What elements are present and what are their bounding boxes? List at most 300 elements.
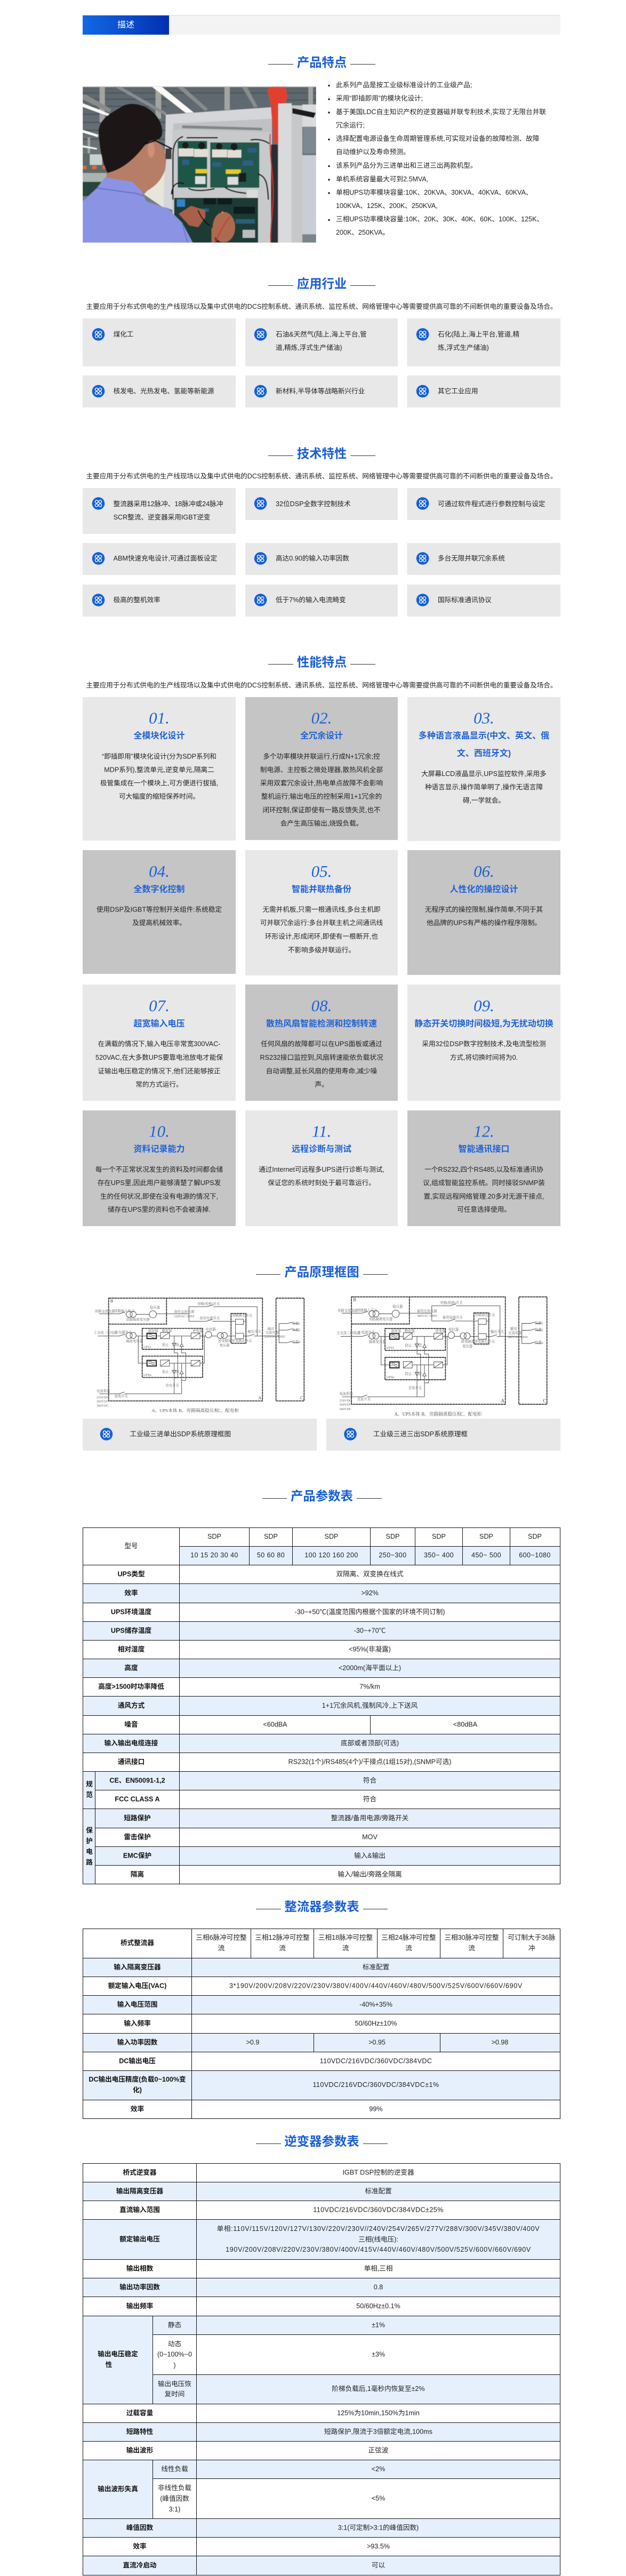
tab: 描述: 描述 — [117, 20, 134, 30]
diagram: three-in single-out SDP schematic: 直流开关 — [114, 1393, 128, 1398]
row: 型号: SDP — [207, 1533, 221, 1540]
row: 效率: 效率 — [133, 2542, 147, 2550]
diagram: three-in three-out SDP schematic: 旁路静态开关 — [475, 1312, 495, 1317]
row: 效率: >92% — [361, 1589, 379, 1597]
card: 石化: 炼,浮式生产储油) — [438, 344, 489, 351]
row: 输入功率因数: >0.98 — [492, 2038, 508, 2046]
diagram: three-in single-out SDP schematic: 旁路隔离变压器 — [126, 1317, 150, 1322]
feature bullet list: 单相UPS功率模块容量:10K、20KVA、30KVA、40KVA、60KVA、 — [336, 188, 533, 196]
diagram: three-in three-out SDP schematic: 备用电源开关 — [443, 1315, 463, 1320]
diagram: three-in single-out SDP schematic — [94, 1298, 304, 1413]
row: 输入电压范围: 输入电压范围 — [117, 2000, 157, 2009]
row group: 保护电路: 整流器/备用电源/旁路开关 — [331, 1814, 409, 1822]
diagram: three-in three-out SDP schematic: B — [353, 1297, 356, 1302]
row: 峰值因数: 3:1(可定制>3:1的峰值因数) — [338, 2524, 419, 2531]
card 03 — [407, 697, 560, 841]
row: 输出功率因数 — [83, 2278, 560, 2297]
row: 桥式整流器 — [83, 1929, 560, 1958]
card: 软件程式: 可通过软件程式进行参数控制与设定 — [438, 500, 545, 508]
row: 通讯接口: 通讯接口 — [118, 1758, 145, 1765]
feature bullet list — [328, 81, 546, 236]
card: 新材料 — [245, 375, 398, 407]
row: 输入频率: 50/60Hz±10% — [355, 2020, 397, 2027]
card: 石油&天然气: 道,精炼,浮式生产储油) — [276, 344, 342, 351]
card 08: 08. — [311, 996, 332, 1015]
row: 型号: 250~300 — [379, 1551, 407, 1559]
card 05: 智能并联热备份 — [292, 884, 351, 894]
row: 输入功率因数: >0.95 — [368, 2038, 386, 2046]
row group: 输出波形失真: 3:1) — [169, 2506, 180, 2513]
diagram: three-in single-out SDP schematic: C — [300, 1395, 303, 1400]
diagram: three-in single-out SDP schematic: 220VAC 50HZ — [174, 1315, 195, 1318]
card 08 — [245, 985, 398, 1101]
card 11: 远程诊断与测试 — [292, 1143, 351, 1154]
row: 输入功率因数 — [83, 2033, 560, 2052]
diagram: three-in single-out SDP schematic: A — [258, 1395, 262, 1400]
diagram: three-in three-out SDP schematic: 充电开关 — [408, 1385, 422, 1390]
card: 新材料: 新材料,半导体等战略新兴行业 — [276, 387, 365, 395]
caption card: three-output schematic: 工业级三进三出SDP系统原理框 — [373, 1430, 468, 1438]
card: 煤化工 — [83, 318, 236, 366]
row: 型号: 型号 — [124, 1542, 138, 1550]
diagram: three-in three-out SDP schematic: C、配电柜 — [460, 1411, 482, 1417]
diagram: three-in single-out SDP schematic: 逆变隔离 — [218, 1338, 232, 1343]
diagram: three-in three-out SDP schematic: 隔离变压器 — [369, 1339, 386, 1344]
diagram: three-in single-out SDP schematic: 隔离变压器 — [126, 1339, 143, 1343]
card 05: 05. — [311, 862, 332, 881]
diagram: three-in single-out SDP schematic: 输出 — [268, 1326, 274, 1331]
diagram: three-in single-out SDP schematic: 旁路(检修)开关 — [197, 1301, 220, 1306]
card 07 body: 520VAC,在大多数UPS要靠电池放电才能保 — [95, 1054, 223, 1061]
row group: 保护电路: 雷击保护 — [124, 1833, 151, 1841]
feature bullet list: 100KVA、125K、200K、250KVA, — [336, 202, 438, 210]
row: 直流冷启动: 可以 — [372, 2562, 385, 2569]
row: 输出功率因数: 输出功率因数 — [119, 2283, 160, 2291]
row: 直流冷启动 — [83, 2556, 560, 2575]
row: 桥式整流器: 可订制大于36脉 — [508, 1934, 556, 1941]
row group: 输出电压稳定性: 动态 — [168, 2340, 181, 2348]
diagram: three-in single-out SDP schematic: 电抗器 — [206, 1327, 216, 1332]
row: 桥式整流器: 流 — [405, 1945, 412, 1952]
row: 输入电压范围: -40%+35% — [359, 2001, 392, 2009]
diagram: three-in single-out SDP schematic: 防止二极管 — [162, 1369, 180, 1374]
diagram: three-in single-out SDP schematic: 主电源开关 — [115, 1330, 132, 1334]
row: 额定输出电压 — [83, 2220, 560, 2259]
intro text: applications: 主要应用于分布式供电的生产线现场以及集中式供电的DCS控制系统、通讯系统、监控系统、网络管理中心等需要提供高可靠的不间断供电的重要设备及场合。 — [86, 302, 557, 310]
row: 额定输入电压: 3*190V/200V/208V/220V/230V/380V/400V/440V/460V/480V/500V/525V/600V/660V/690V — [229, 1982, 523, 1989]
feature bullet list: 该系列产品分为三进单出和三进三出两款机型。 — [336, 162, 477, 170]
card 09 body — [422, 1040, 546, 1061]
diagram: three-in three-out SDP schematic: C — [543, 1398, 546, 1404]
row group: 规范: CE、EN50091-1,2 — [109, 1777, 165, 1785]
row: 输入功率因数: >0.9 — [246, 2038, 259, 2046]
row group: 规范: 符合 — [363, 1776, 376, 1785]
heading: 性能特点: 性能特点 — [297, 655, 347, 669]
card 09 body: 方式,将切换时间将为0. — [450, 1053, 518, 1061]
card: 整流器 — [83, 488, 236, 534]
card 01: 全模块化设计 — [133, 731, 185, 740]
row: 噪音: <80dBA — [453, 1721, 478, 1728]
row group: 输出电压稳定性: 输出电压稳定 — [98, 2350, 138, 2358]
card 04 body — [97, 906, 222, 927]
row: 高度>1500时功率降低: 7%/km — [359, 1683, 380, 1691]
row: 桥式整流器: 流 — [218, 1945, 225, 1952]
card: 并联冗余 — [407, 543, 560, 575]
card: 整流器: 整流器采用12脉冲、18脉冲或24脉冲 — [114, 500, 223, 508]
row: 型号: SDP — [325, 1533, 338, 1540]
card 12 body — [423, 1166, 545, 1213]
card: 石油&天然气 — [245, 318, 398, 366]
row group: 输出波形失真: 线性负载 — [161, 2465, 188, 2473]
tab header bar — [83, 15, 560, 35]
card 04: 全数字化控制 — [133, 884, 185, 894]
card 11: 11. — [312, 1122, 331, 1140]
tab: 描述 — [83, 15, 169, 35]
card 08 body: RS232接口监控到,风扇转速能依负载状况 — [260, 1053, 383, 1061]
row: 高度: 高度 — [124, 1664, 138, 1671]
card 03: 03. — [473, 708, 494, 727]
card 09: 静态开关切换时间极短,为无扰动切换 — [414, 1019, 553, 1028]
diagram: three-in three-out SDP schematic: 负载2 — [535, 1327, 543, 1332]
row: DC输出电压精度: 110VDC/216VDC/360VDC/384VDC±1% — [312, 2081, 439, 2089]
card 01: 01. — [149, 708, 170, 727]
row: UPS类型 — [83, 1565, 560, 1584]
intro text: technical features: 主要应用于分布式供电的生产线现场以及集中式供电的DCS控制系统、通讯系统、监控系统、网络管理中心等需要提供高可靠的不间断供电的重要设备及场合。 — [86, 472, 557, 480]
card 08 body: 自动调整,延长风扇的使用寿命,减少噪 — [266, 1067, 378, 1075]
diagram: three-in single-out SDP schematic: 216VDC — [97, 1396, 109, 1399]
feature bullet list: 冗余运行; — [336, 121, 365, 129]
row group: 输出波形失真 — [83, 2460, 560, 2518]
row: 通讯接口 — [83, 1753, 560, 1772]
row: 输入输出电缆连接 — [83, 1734, 560, 1753]
diagram: three-in single-out SDP schematic: 逆变器 — [192, 1328, 203, 1333]
row: 桥式整流器: 冲 — [528, 1945, 535, 1952]
heading: 逆变器参数表: 逆变器参数表 — [284, 2134, 359, 2148]
card 03 body — [421, 770, 547, 804]
card 11 body: 保证您的系统时刻处于最可靠运行。 — [268, 1179, 375, 1187]
intro text: performance: 主要应用于分布式供电的生产线现场以及集中式供电的DCS控制系统、通讯系统、监控系统、网络管理中心等需要提供高可靠的不间断供电的重要设备及场合。 — [86, 681, 557, 689]
diagram: three-in single-out SDP schematic: 备用电源开关 — [199, 1315, 220, 1320]
diagram: three-in single-out SDP schematic: 旁路静态开关 — [232, 1313, 253, 1317]
row: UPS环境温度: UPS环境温度 — [111, 1607, 152, 1616]
row: 输入隔离变压器: 输入隔离变压器 — [114, 1963, 161, 1971]
row: UPS储存温度: UPS储存温度 — [111, 1627, 152, 1634]
card 02 — [245, 697, 398, 840]
row group: 规范: 规 — [86, 1780, 93, 1788]
diagram: three-in single-out SDP schematic: 负载2 — [292, 1327, 300, 1332]
row: 峰值因数 — [83, 2518, 560, 2538]
card: 其它工业应用: 其它工业应用 — [438, 387, 478, 395]
card 06 body — [425, 906, 543, 927]
row: 额定输出电压: 单相:110V/115V/120V/127V/130V/220V/230V//240V/254V/265V/277V/288V/300V/345V/380V/400V — [217, 2225, 540, 2233]
feature bullet list: 采用“即插即用”的模块化设计; — [336, 94, 423, 102]
row: 输出相数: 输出相数 — [126, 2265, 154, 2272]
row: 短路特性: 短路保护,限流于3倍额定电流,100ms — [324, 2428, 432, 2435]
card 10 body: 存在UPS里,因此用户能够清楚了解UPS发 — [98, 1179, 221, 1187]
row group: 规范: 符合 — [363, 1795, 376, 1803]
row: 输入输出电缆连接: 输入输出电缆连接 — [105, 1739, 158, 1747]
card 01 body — [100, 753, 218, 800]
diagram: three-in three-out SDP schematic: 216VDC — [339, 1399, 351, 1403]
card 02 body: 多个功率模块并联运行,行成N+1冗余;控 — [263, 752, 380, 761]
card 10: 10. — [149, 1122, 170, 1140]
diagram: three-in three-out SDP schematic: A — [501, 1398, 505, 1404]
card 02 body: 整机运行;输出电压的控制采用1+1冗余的 — [261, 793, 382, 800]
diagram: three-in three-out SDP schematic — [336, 1297, 547, 1417]
row: 输入输出电缆连接: 底部或者顶部(可选) — [341, 1739, 399, 1747]
diagram: three-in three-out SDP schematic: 备用交流电源 — [417, 1308, 437, 1314]
row: 额定输入电压 — [83, 1977, 560, 1996]
row: 通风方式: 1+1冗余风机,强制风冷,上下送风 — [322, 1701, 418, 1709]
row group: 保护电路: EMC保护 — [123, 1852, 151, 1859]
row: 输出波形 — [83, 2442, 560, 2460]
card 06 body: 他品牌的UPS有严格的操作程序限制。 — [427, 918, 541, 927]
heading: 产品原理框图: 产品原理框图 — [284, 1265, 359, 1279]
diagram: three-in single-out SDP schematic: 变压器 — [220, 1343, 230, 1348]
card 10 body: 储存在UPS里的资料也不会被清掉. — [108, 1205, 211, 1213]
row: 型号: SDP — [528, 1533, 542, 1540]
diagram: three-in three-out SDP schematic: 主电源开关 — [358, 1330, 375, 1335]
diagram: three-in single-out SDP schematic: 充电开关 — [165, 1382, 179, 1387]
row: 通讯接口: RS232(1个)/RS485(4个)/干接点(1组15对),(SNMP可选) — [288, 1758, 451, 1765]
table: product parameters — [83, 1527, 560, 1884]
row: 短路特性: 短路特性 — [126, 2428, 154, 2435]
table: rectifier parameters — [83, 1929, 560, 2118]
card 03 body: 大屏幕LCD液晶显示,UPS监控软件,采用多 — [421, 770, 547, 778]
row: 效率 — [83, 2100, 560, 2118]
caption card: three-output schematic — [326, 1419, 560, 1451]
row: 型号: SDP — [432, 1533, 446, 1540]
row group: 输出电压稳定性: 阶梯负载后,1毫秒内恢复至±2% — [332, 2385, 425, 2393]
card 06 — [407, 850, 560, 975]
card 03: 文、西班牙文) — [457, 748, 511, 758]
table: inverter parameters — [83, 2163, 560, 2575]
diagram: three-in single-out SDP schematic: UPS1 — [143, 1345, 151, 1349]
card 10 body — [95, 1165, 223, 1213]
card 02: 02. — [311, 708, 332, 727]
diagram: three-in single-out SDP schematic: C、配电柜 — [218, 1407, 239, 1413]
row: 输入隔离变压器 — [83, 1958, 560, 1977]
card 10 body: 每一个不正常状况发生的资料及时间都会储 — [95, 1165, 223, 1173]
row group: 保护电路: 输入/输出/旁路全隔离 — [338, 1870, 402, 1878]
row group: 输出波形失真: <5% — [372, 2495, 385, 2502]
card: 功率因数 — [245, 543, 398, 575]
row group: 输出电压稳定性: ) — [173, 2362, 176, 2369]
diagram: three-in single-out SDP schematic: UPSn — [143, 1373, 152, 1377]
card: DSP: 32位DSP全数字控制技术 — [276, 500, 351, 508]
diagram: three-in single-out SDP schematic: 旁路输入开关 — [114, 1308, 135, 1313]
row: 输入电压范围 — [83, 1996, 560, 2014]
diagram: three-in single-out SDP schematic: 360VDC — [97, 1399, 109, 1403]
card 02 body: 会产生高压输出,烧毁负载。 — [280, 819, 363, 827]
diagram: three-in three-out SDP schematic: 电抗器 — [448, 1327, 459, 1332]
feature bullet list: 单机系统容量最大可到2.5MVA, — [336, 175, 428, 183]
diagram: three-in three-out SDP schematic: 整流器 — [405, 1329, 415, 1333]
row: DC输出电压: DC输出电压 — [119, 2057, 156, 2065]
card 03: 多种语言液晶显示(中文、英文、俄 — [419, 731, 549, 740]
feature bullet list: 三相UPS功率模块容量:10K、20K、30K、40K、60K、100K、125K、 — [336, 215, 543, 223]
card 12 body: 一个RS232,四个RS485,以及标准通讯协 — [424, 1166, 543, 1173]
photo: technician testing UPS circuit boards — [83, 86, 316, 243]
row: DC输出电压 — [83, 2052, 560, 2070]
card 11 — [245, 1110, 398, 1226]
card 09 — [407, 985, 560, 1101]
diagram: three-in three-out SDP schematic: 旁路(检修)开关 — [440, 1300, 463, 1305]
row: 输出隔离变压器 — [83, 2182, 560, 2201]
heading: 整流器参数表: 整流器参数表 — [284, 1899, 359, 1914]
row: UPS环境温度 — [83, 1603, 560, 1621]
feature bullet list: 200K、250KVA。 — [336, 229, 389, 236]
card 12 — [407, 1110, 560, 1226]
row: UPS环境温度: -30~+50℃(温度范围内根据个国家的环境不同订制) — [294, 1607, 445, 1616]
diagram: three-in three-out SDP schematic: 负载1 — [535, 1321, 543, 1325]
row: 直流冷启动: 直流冷启动 — [123, 2561, 156, 2569]
row: 型号: SDP — [386, 1533, 399, 1540]
card: 石化 — [407, 318, 560, 366]
card 05 body: 可并联冗余运行:多台并联主机之间通讯线 — [260, 918, 383, 927]
row group: 规范: FCC CLASS A — [115, 1795, 160, 1803]
feature bullet list: 自动维护以及寿命预测。 — [336, 148, 410, 156]
row: 型号: 350~ 400 — [424, 1551, 454, 1559]
card: 其它工业应用 — [407, 375, 560, 407]
row: 桥式整流器: 三相18脉冲可控整 — [318, 1934, 373, 1941]
diagram: three-in three-out SDP schematic: 逆变静态开关 — [475, 1339, 495, 1343]
diagram: three-in single-out SDP schematic: A、UPS本体 — [151, 1407, 178, 1413]
diagram: three-in single-out SDP schematic: 滤波器 — [148, 1328, 158, 1333]
card 07 body: 常的方式运行。 — [135, 1081, 183, 1088]
row: UPS储存温度 — [83, 1621, 560, 1641]
diagram: three-in single-out SDP schematic: B、旁路隔离稳压柜 — [179, 1407, 219, 1413]
diagram: three-in single-out SDP schematic: 384VDC — [97, 1404, 109, 1407]
diagram: three-in three-out SDP schematic: 384VDC — [339, 1407, 351, 1411]
row: 型号 — [83, 1527, 560, 1565]
card 02 body — [260, 752, 383, 827]
row: 过载容量: 125%为10min,150%为1min — [337, 2410, 420, 2417]
card: ABM — [83, 543, 236, 575]
row: 型号: 100 120 160 200 — [304, 1551, 358, 1559]
diagram: three-in three-out SDP schematic: 电池系统 — [339, 1391, 353, 1396]
row: 桥式整流器: 三相30脉冲可控整 — [444, 1934, 499, 1941]
row: 桥式整流器: 三相12脉冲可控整 — [255, 1934, 310, 1941]
card 06: 人性化的操控设计 — [450, 884, 518, 894]
industry cards — [83, 318, 560, 407]
row: 输入频率: 输入频率 — [124, 2019, 151, 2027]
card 07 body: 在满载的情况下,输入电压非常宽300VAC- — [98, 1040, 220, 1047]
card: 整机效率: 极高的整机效率 — [114, 596, 160, 604]
row: 输出频率: 输出频率 — [126, 2302, 154, 2310]
row: 额定输出电压: 额定输出电压 — [119, 2235, 160, 2243]
diagram: three-in three-out SDP schematic: 360VDC — [339, 1403, 351, 1407]
technical feature cards — [83, 488, 560, 617]
row group: 输出波形失真: <2% — [372, 2465, 385, 2473]
row: 型号: 600~1080 — [519, 1551, 551, 1559]
diagram: three-in single-out SDP schematic: 整流器 — [162, 1328, 172, 1333]
card 01 body: 可大幅度的缩短保养时间。 — [119, 793, 199, 800]
row: 相对湿度: 相对湿度 — [118, 1645, 145, 1653]
card 09: 09. — [473, 996, 494, 1015]
row: 额定输出电压: 190V/200V/208V/220V/230V/380V/400V/415V/440V/460V/480V/500V/525V/600V/660V/690V — [226, 2246, 531, 2253]
row group: 输出电压稳定性: 输出电压恢 — [158, 2380, 191, 2388]
row: 输出频率: 50/60Hz±0.1% — [356, 2302, 400, 2310]
card: 新能源: 核发电、光热发电、氢能等新能源 — [114, 387, 214, 395]
card: 电流畸变 — [245, 585, 398, 617]
feature bullet list: 选择配置电源设备生命周期管理系统,可实现对设备的故障检测、故障 — [336, 134, 540, 142]
card 05 body: 无需并机板,只需一根通讯线,多台主机即 — [262, 906, 381, 913]
row: 高度>1500时功率降低 — [83, 1678, 560, 1696]
card 05 body: 环形设计,形成闭环,即使有一根断开,也 — [265, 932, 378, 940]
row: 噪音: 噪音 — [124, 1721, 138, 1728]
diagram: three-in single-out SDP schematic: 稳压器 — [150, 1305, 160, 1309]
row: 效率: 效率 — [131, 2105, 144, 2113]
heading: 产品参数表: 产品参数表 — [291, 1489, 353, 1503]
row: 高度>1500时功率降低: 高度>1500时功率降低 — [98, 1682, 164, 1691]
row: 型号: 450~ 500 — [471, 1551, 501, 1559]
row group: 输出电压稳定性: 复时间 — [165, 2390, 184, 2398]
diagram: three-in three-out SDP schematic: 旁路输入开关 — [357, 1308, 378, 1313]
row group: 输出电压稳定性: 性 — [106, 2361, 113, 2369]
diagram: three-in three-out SDP schematic: 交流电源 — [508, 1330, 522, 1335]
row group: 保护电路: 电 — [86, 1848, 93, 1855]
row: 型号: 10 15 20 30 40 — [190, 1551, 238, 1559]
diagram: three-in single-out SDP schematic: 电池系统 — [97, 1388, 110, 1393]
card 08 body — [260, 1040, 383, 1088]
card: 并联冗余: 多台无限并联冗余系统 — [438, 554, 505, 562]
row: DC输出电压精度 — [83, 2070, 560, 2100]
card 08 body: 任何风扇的故障都可以在UPS面板或通过 — [261, 1040, 382, 1047]
card 12 body: 置,实现远程网络管理.20多对无源干接点, — [423, 1193, 544, 1200]
row: 过载容量 — [83, 2404, 560, 2422]
row group: 保护电路 — [83, 1809, 560, 1884]
row group: 输出电压稳定性: 静态 — [168, 2321, 181, 2329]
caption card: single-output schematic: 工业级三进单出SDP系统原理框图 — [130, 1430, 231, 1438]
row: 通风方式: 通风方式 — [118, 1701, 145, 1709]
row group: 保护电路: 路 — [86, 1858, 93, 1866]
row group: 保护电路: MOV — [362, 1834, 378, 1841]
row group: 输出波形失真: (峰值因数 — [160, 2494, 189, 2502]
row: 输出相数 — [83, 2259, 560, 2278]
card 07 body: 证输出电压稳定的情况下,他们还能够按正 — [98, 1067, 221, 1075]
card 06 body: 无程序式的操控限制,操作简单,不同于其 — [425, 906, 543, 913]
diagram: three-in single-out SDP schematic: 备用交流电源 — [174, 1309, 195, 1314]
card 02: 全冗余设计 — [300, 731, 343, 740]
row: 型号: 50 60 80 — [257, 1551, 285, 1559]
row: 输出相数: 单相,三相 — [364, 2265, 392, 2272]
card 04 body: 及提高机械效率。 — [132, 918, 186, 927]
row: 型号: SDP — [479, 1533, 493, 1540]
row: 输出波形: 正弦波 — [368, 2446, 389, 2454]
row: 输出隔离变压器: 输出隔离变压器 — [116, 2187, 163, 2195]
caption card: single-output schematic — [83, 1419, 317, 1451]
diagram: three-in three-out SDP schematic: 防止二极管 — [405, 1371, 422, 1376]
card: 通讯协议: 国际标准通讯协议 — [438, 596, 492, 604]
row: 额定输出电压: 三相(线电压): — [358, 2236, 398, 2243]
diagram: three-in three-out SDP schematic: B、旁路隔离稳压柜 — [421, 1411, 462, 1417]
row: 直流输入范围: 110VDC/216VDC/360VDC/384VDC±25% — [313, 2206, 444, 2213]
diagram: three-in three-out SDP schematic: UPS1 — [386, 1346, 394, 1350]
row: 桥式逆变器 — [83, 2163, 560, 2182]
card 01 body: “即插即用”模块化设计(分为SDP系列和 — [102, 753, 216, 761]
row: 噪音: <60dBA — [263, 1721, 287, 1728]
card 07 — [83, 985, 236, 1101]
diagram: three-in three-out SDP schematic: 防止二极管 — [405, 1343, 422, 1348]
row: 相对湿度: <95%(非凝露) — [349, 1645, 391, 1653]
row: 输出频率 — [83, 2297, 560, 2316]
diagram: three-in single-out SDP schematic: 主交流三相电源 — [94, 1330, 118, 1335]
diagram: three-in single-out SDP schematic: 负载n — [292, 1339, 301, 1344]
row: 桥式整流器: 三相24脉冲可控整 — [381, 1934, 436, 1941]
diagram: three-in three-out SDP schematic: 逆变隔离 — [461, 1339, 475, 1343]
diagram: three-in three-out SDP schematic: 输出开关 — [491, 1329, 504, 1334]
